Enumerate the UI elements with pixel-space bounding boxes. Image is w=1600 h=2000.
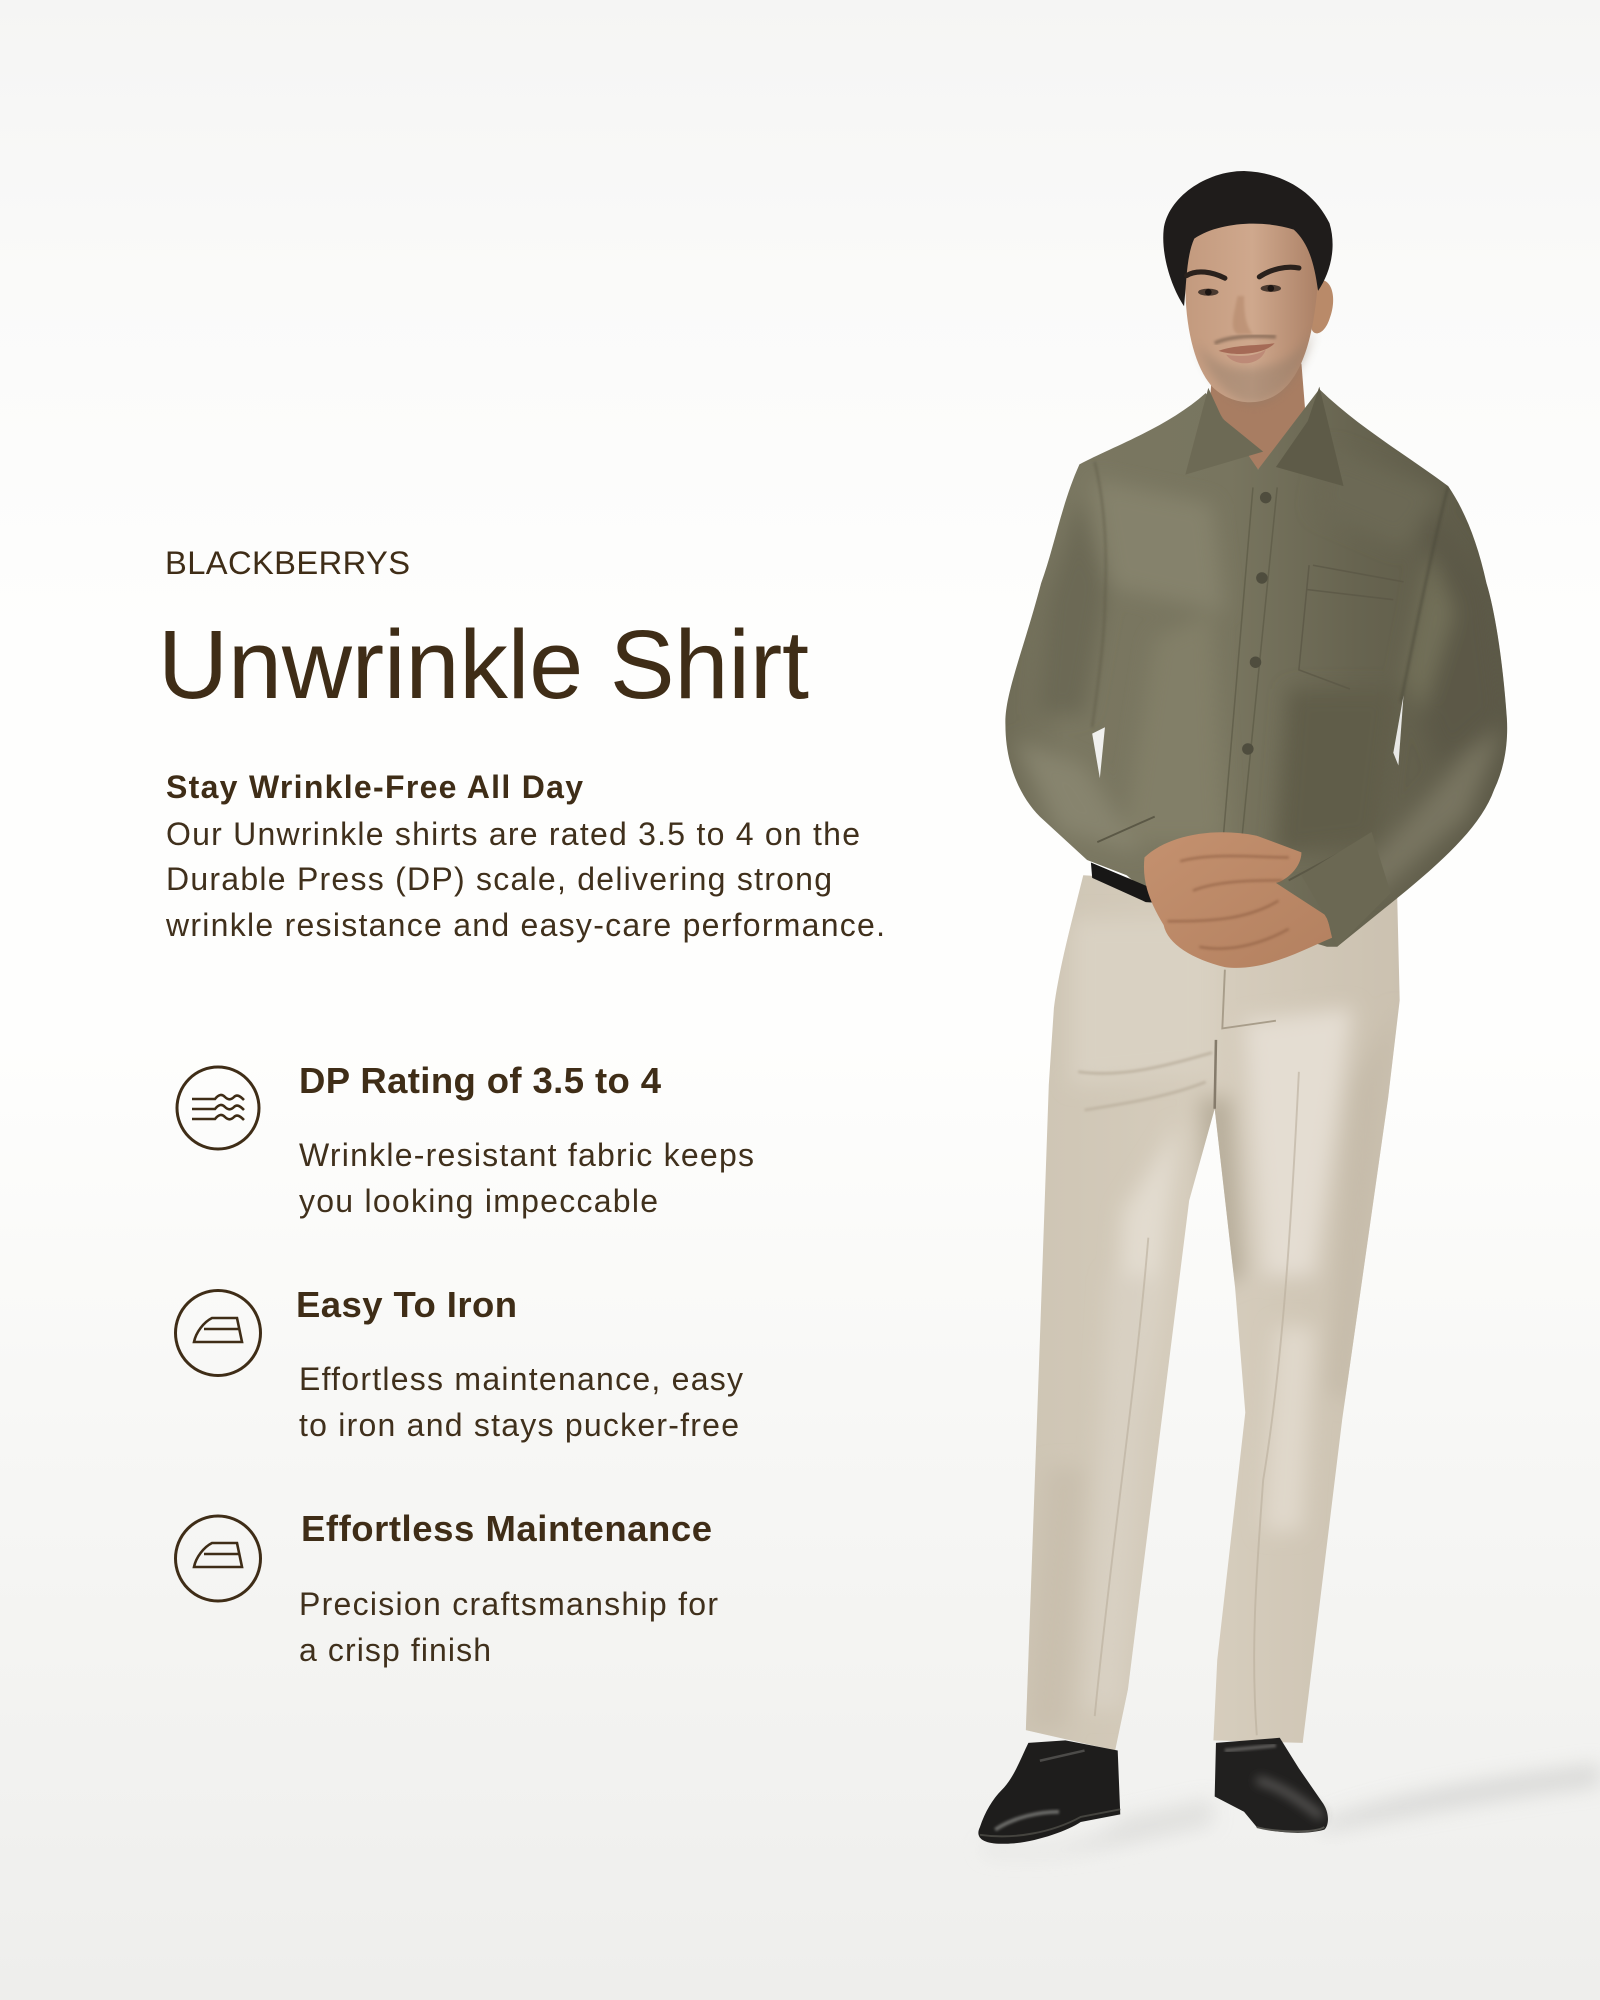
description paragraph xyxy=(165,816,885,943)
heading: Effortless Maintenance xyxy=(301,1508,712,1549)
description paragraph: Durable Press (DP) scale, delivering strong xyxy=(166,861,832,897)
right cuff xyxy=(1301,832,1391,947)
belt xyxy=(1091,863,1166,903)
feature: DP rating xyxy=(177,1060,754,1219)
icon: iron xyxy=(176,1516,260,1601)
description: to iron and stays pucker-free xyxy=(299,1407,739,1443)
description: Wrinkle-resistant fabric keeps xyxy=(299,1137,754,1173)
ear xyxy=(1312,280,1333,333)
trousers xyxy=(1026,875,1400,1751)
model photo illustration xyxy=(978,171,1600,1856)
hair xyxy=(1163,171,1333,306)
sleeve gaps xyxy=(1092,727,1105,778)
collar xyxy=(1185,388,1263,475)
description: you looking impeccable xyxy=(299,1183,658,1219)
hands xyxy=(1144,832,1332,968)
floor shadow xyxy=(982,1763,1600,1856)
left shoe xyxy=(978,1740,1120,1844)
eyes xyxy=(1198,285,1281,296)
title: Unwrinkle Shirt xyxy=(158,610,809,719)
description: Precision craftsmanship for xyxy=(299,1586,718,1622)
description xyxy=(299,1137,754,1219)
heading: DP Rating of 3.5 to 4 xyxy=(299,1060,662,1101)
panel: intro text xyxy=(158,544,885,943)
right shoe xyxy=(1215,1738,1328,1833)
neck xyxy=(1208,364,1307,470)
brand name: BLACKBERRYS xyxy=(165,544,410,581)
mouth xyxy=(1215,336,1276,363)
heading: Easy To Iron xyxy=(296,1284,517,1325)
pocket xyxy=(1299,565,1404,689)
feature: effortless maintenance xyxy=(176,1508,718,1668)
icon: iron xyxy=(176,1290,260,1376)
description xyxy=(299,1586,718,1668)
description xyxy=(299,1361,743,1443)
feature: easy to iron xyxy=(176,1284,743,1443)
subheading: Stay Wrinkle-Free All Day xyxy=(166,769,583,805)
buttons xyxy=(1242,492,1271,755)
shirt xyxy=(1005,387,1507,947)
icon: fabric waves xyxy=(177,1067,259,1149)
eyebrows xyxy=(1187,267,1299,278)
description: Effortless maintenance, easy xyxy=(299,1361,743,1397)
placket xyxy=(1222,487,1277,855)
face xyxy=(1185,211,1319,402)
description: a crisp finish xyxy=(299,1632,491,1668)
description paragraph: Our Unwrinkle shirts are rated 3.5 to 4 on the xyxy=(166,816,860,852)
head xyxy=(1163,171,1333,405)
description paragraph: wrinkle resistance and easy-care performance. xyxy=(165,907,885,943)
